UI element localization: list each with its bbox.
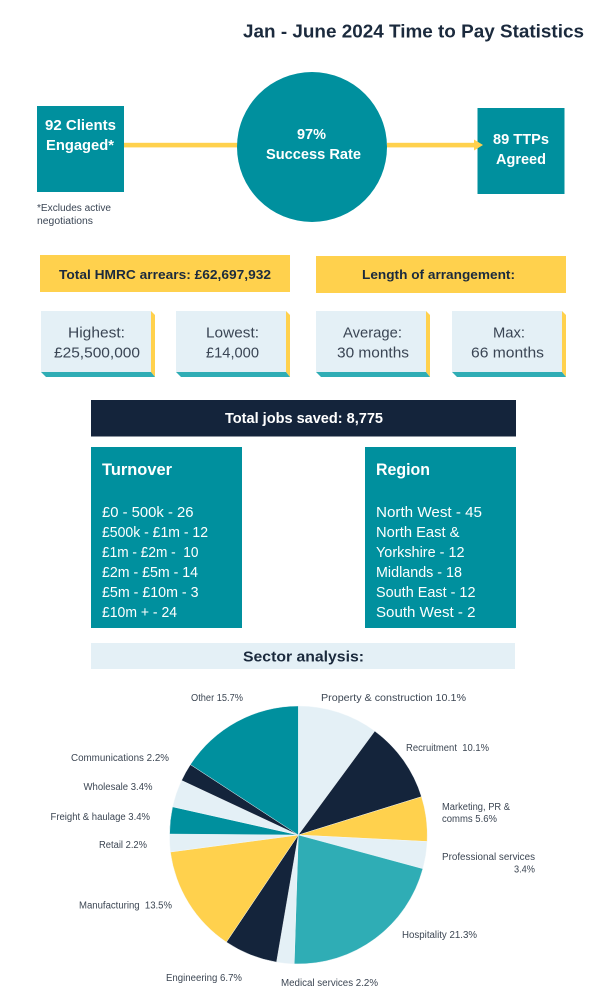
slice: freight and haulage	[170, 807, 298, 835]
pie labels: Recruitment 10.1%	[406, 743, 489, 754]
title: Jan - June 2024 Time to Pay Statistics	[243, 22, 584, 42]
list: regions: Yorkshire - 12	[376, 544, 464, 561]
slice: retail	[170, 834, 298, 852]
pie labels: Other 15.7%	[191, 693, 243, 704]
panel: region	[365, 447, 516, 628]
list: regions: South East - 12	[376, 584, 476, 601]
card: lowest arrears: Lowest:	[206, 324, 259, 342]
pie labels: 3.4%	[514, 864, 535, 876]
banner: total HMRC arrears: Total HMRC arrears: £62,697,932	[59, 267, 271, 282]
arrow: clients to success rate connector	[124, 143, 238, 147]
list: turnover bands	[102, 504, 208, 621]
card: highest arrears: £25,500,000	[54, 344, 140, 362]
slice: hospitality	[294, 835, 423, 964]
list: turnover bands: £2m - £5m - 14	[102, 564, 198, 581]
banner: sector analysis	[91, 643, 515, 669]
footnote: *Excludes active	[37, 203, 111, 214]
card: max length	[452, 311, 566, 377]
list: turnover bands: £0 - 500k - 26	[102, 504, 194, 521]
banner: total HMRC arrears	[40, 255, 290, 292]
list: turnover bands: £1m - £2m - 10	[102, 544, 198, 561]
slice: professional services	[298, 835, 427, 869]
list: turnover bands: £10m + - 24	[102, 604, 177, 621]
flow diagram: clients to agreed TTPs	[37, 72, 564, 227]
card: average length: Average:	[343, 324, 402, 342]
heading: turnover: Turnover	[102, 461, 173, 479]
list: regions: North East &	[376, 524, 460, 541]
slice: engineering	[226, 835, 298, 962]
box: clients engaged: Engaged*	[46, 138, 114, 154]
slice: marketing, PR and comms	[298, 797, 427, 842]
pie labels: Communications 2.2%	[71, 753, 169, 764]
heading: region: Region	[376, 461, 430, 479]
arrow: success rate to TTPs	[387, 140, 483, 150]
banner: length of arrangement	[316, 256, 566, 293]
pie labels: Medical services 2.2%	[281, 978, 378, 989]
card: highest arrears	[41, 311, 155, 377]
circle: success rate: Success Rate	[266, 147, 361, 163]
footnote: negotiations	[37, 216, 93, 227]
banner: length of arrangement: Length of arrangement:	[362, 267, 515, 282]
card: max length: Max:	[493, 324, 525, 342]
circle: success rate: 97%	[297, 127, 326, 143]
box: TTPs agreed: 89 TTPs	[493, 132, 549, 148]
list: regions: Midlands - 18	[376, 564, 462, 581]
box: TTPs agreed: Agreed	[496, 152, 546, 168]
pie labels: Professional services	[442, 852, 535, 863]
list: turnover bands: £500k - £1m - 12	[102, 524, 208, 541]
footnote	[37, 203, 111, 227]
slice: wholesale	[173, 780, 298, 835]
slice: manufacturing	[170, 835, 298, 942]
banner: sector analysis: Sector analysis:	[243, 648, 364, 666]
card: lowest arrears	[176, 311, 290, 377]
panel: turnover	[91, 447, 242, 628]
box: TTPs agreed	[478, 108, 564, 194]
slice: other	[190, 706, 298, 835]
banner: total jobs saved: Total jobs saved: 8,775	[225, 411, 383, 427]
pie labels: Hospitality 21.3%	[402, 930, 477, 941]
list: regions: North West - 45	[376, 504, 482, 521]
banner: total jobs saved	[91, 400, 516, 436]
pie labels: comms 5.6%	[442, 814, 497, 825]
card: average length: 30 months	[337, 344, 409, 362]
pie chart: sector analysis	[170, 706, 427, 964]
card: average length	[316, 311, 430, 377]
pie labels: Retail 2.2%	[99, 840, 147, 851]
list: regions	[376, 504, 482, 621]
slice: property and construction	[298, 706, 375, 835]
card: highest arrears: Highest:	[68, 324, 125, 342]
pie labels: Property & construction 10.1%	[321, 693, 466, 704]
pie labels: Marketing, PR &	[442, 802, 510, 813]
circle: success rate	[237, 72, 387, 222]
slice: recruitment	[298, 731, 422, 835]
card: max length: 66 months	[471, 344, 544, 362]
pie labels: Freight & haulage 3.4%	[50, 812, 150, 823]
card: lowest arrears: £14,000	[206, 344, 259, 362]
list: regions: South West - 2	[376, 604, 476, 621]
pie labels: Manufacturing 13.5%	[79, 900, 172, 912]
box: clients engaged	[37, 106, 124, 192]
list: turnover bands: £5m - £10m - 3	[102, 584, 198, 601]
pie labels	[50, 693, 535, 989]
pie labels: Engineering 6.7%	[166, 973, 242, 984]
slice: communications	[182, 765, 298, 835]
slice: medical services	[276, 835, 298, 964]
pie labels: Wholesale 3.4%	[84, 782, 153, 793]
box: clients engaged: 92 Clients	[45, 118, 116, 134]
